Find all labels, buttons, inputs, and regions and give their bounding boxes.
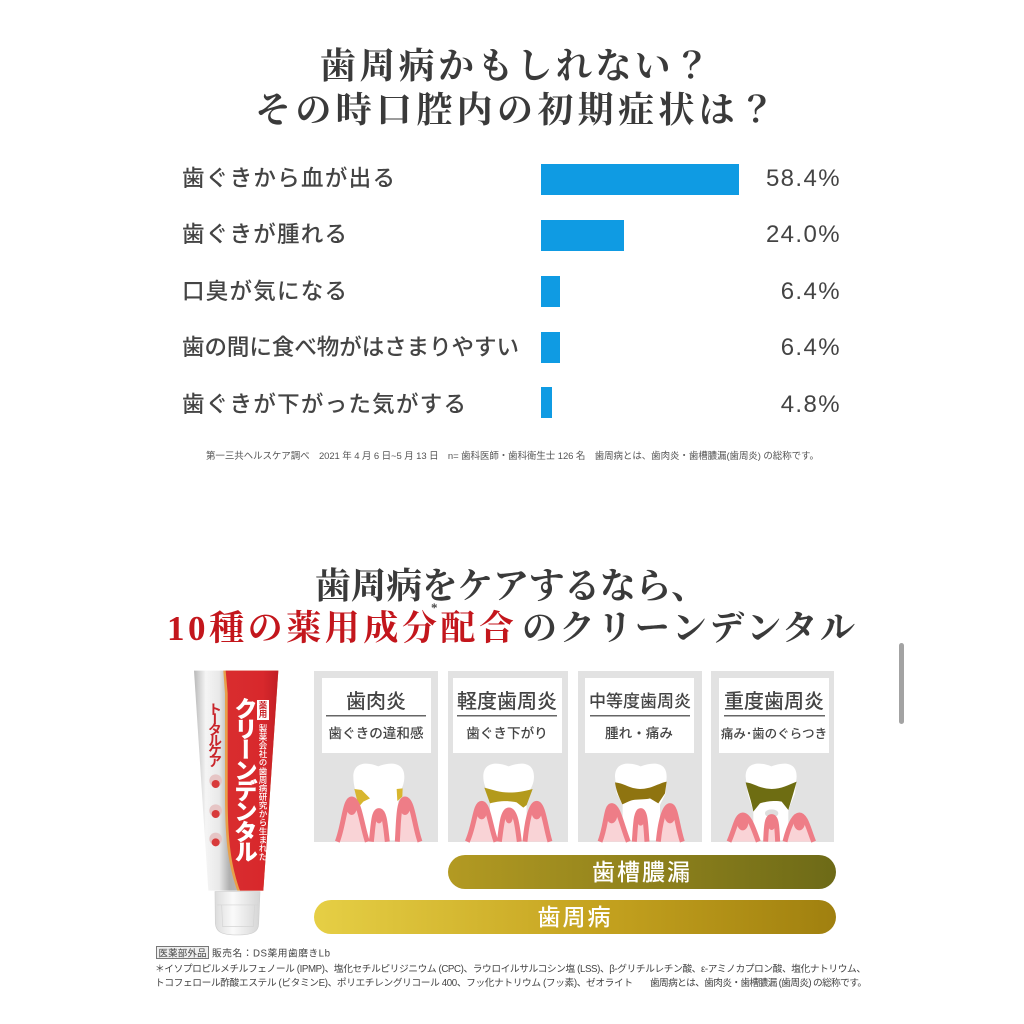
row: bad breath 6.4%: 6.4% <box>781 278 841 305</box>
panel: moderate periodontitis <box>578 671 702 842</box>
pill: periodontal disease: 歯周病 <box>538 904 612 930</box>
title: initial symptoms: 歯周病かもしれない？ <box>320 46 710 86</box>
row: receding gums 4.8% <box>182 387 841 418</box>
footnote: product and ingredients: トコフェロール酢酸エステル (ビタミンE)、ポリエチレングリコール 400、フッ化ナトリウム (フッ素)、ゼオライト <box>155 976 633 989</box>
title: clean dental <box>167 566 855 648</box>
row: bleeding gums 58.4%: 58.4% <box>766 165 841 192</box>
footnote: product and ingredients: 歯周病とは、歯肉炎・歯槽膿漏 (歯周炎) の総称です。 <box>650 976 867 989</box>
panel: mild periodontitis <box>448 671 568 842</box>
row: swollen gums 24.0%: 歯ぐきが腫れる <box>182 222 347 247</box>
badge: quasi-drug: 医薬部外品 <box>158 948 206 958</box>
title: initial symptoms: その時口腔内の初期症状は？ <box>255 90 775 130</box>
row: swollen gums 24.0%: 24.0% <box>766 221 841 248</box>
row: bad breath 6.4%: 口臭が気になる <box>182 279 347 304</box>
title: initial symptoms <box>255 46 775 130</box>
footnote: product and ingredients <box>155 946 867 989</box>
icon: tooth gingivitis <box>337 764 420 842</box>
row: bad breath 6.4% <box>182 276 841 307</box>
icon: toothpaste tube: 薬用 <box>258 700 268 719</box>
row: bleeding gums 58.4%: 歯ぐきから血が出る <box>182 166 395 191</box>
pill: pyorrhea: 歯槽膿漏 <box>592 859 692 885</box>
symptom: severe: 痛み･歯のぐらつき <box>721 726 827 741</box>
symptom: moderate: 腫れ・痛み <box>605 726 673 741</box>
row: receding gums 4.8%: 歯ぐきが下がった気がする <box>182 392 466 417</box>
row: food stuck between teeth 6.4% <box>182 332 841 363</box>
pill: periodontal disease <box>314 900 836 934</box>
row: food stuck between teeth 6.4%: 6.4% <box>781 334 841 361</box>
title: clean dental: 歯周病をケアするなら、 <box>315 566 707 606</box>
pill: pyorrhea <box>448 855 836 889</box>
row: swollen gums 24.0% <box>182 220 841 251</box>
footnote: product and ingredients: ＊イソプロピルメチルフェノール (IPMP)、塩化セチルピリジニウム (CPC)、ラウロイルサルコシン塩 (LSS)、β-グリチルレチン酸、ε-アミノカプロン酸、塩化ナトリウム、 <box>155 962 866 975</box>
icon: tooth moderate <box>600 764 682 842</box>
row: bleeding gums 58.4% <box>182 164 841 195</box>
title: clean dental: のクリーンデンタル <box>522 609 855 648</box>
row: receding gums 4.8%: 4.8% <box>781 391 841 418</box>
heading: severe periodontitis: 重度歯周炎 <box>724 690 824 713</box>
icon: toothpaste tube: トータルケア <box>207 702 223 768</box>
bar chart: initial symptoms <box>182 164 841 418</box>
scrollbar <box>899 643 904 724</box>
icon: toothpaste tube: 製薬会社の歯周病研究から生まれた <box>258 723 268 861</box>
icon: tooth mild <box>467 764 550 842</box>
heading: moderate periodontitis: 中等度歯周炎 <box>589 692 691 711</box>
panel: severe periodontitis <box>711 671 834 842</box>
title: clean dental: 10種の薬用成分配合 <box>167 609 514 648</box>
icon: tooth severe <box>729 764 814 842</box>
heading: gingivitis: 歯肉炎 <box>346 690 406 713</box>
icon: toothpaste tube: クリーンデンタル <box>231 697 257 863</box>
row: food stuck between teeth 6.4%: 歯の間に食べ物がはさまりやすい <box>182 335 519 360</box>
panel: gingivitis <box>314 671 438 842</box>
heading: mild periodontitis: 軽度歯周炎 <box>457 690 557 713</box>
survey source note: 第一三共ヘルスケア調べ 2021 年 4 月 6 日~5 月 13 日 n= 歯科医師・歯科衛生士 126 名 歯周病とは、歯肉炎・歯槽膿漏(歯周炎) の総称です。 <box>206 450 819 462</box>
footnote: product and ingredients: 販売名：DS薬用歯磨きLb <box>212 946 330 960</box>
symptom: gingivitis: 歯ぐきの違和感 <box>328 725 424 741</box>
icon: toothpaste tube <box>194 671 278 935</box>
symptom: mild: 歯ぐき下がり <box>466 725 548 741</box>
title: clean dental: * <box>431 600 438 615</box>
